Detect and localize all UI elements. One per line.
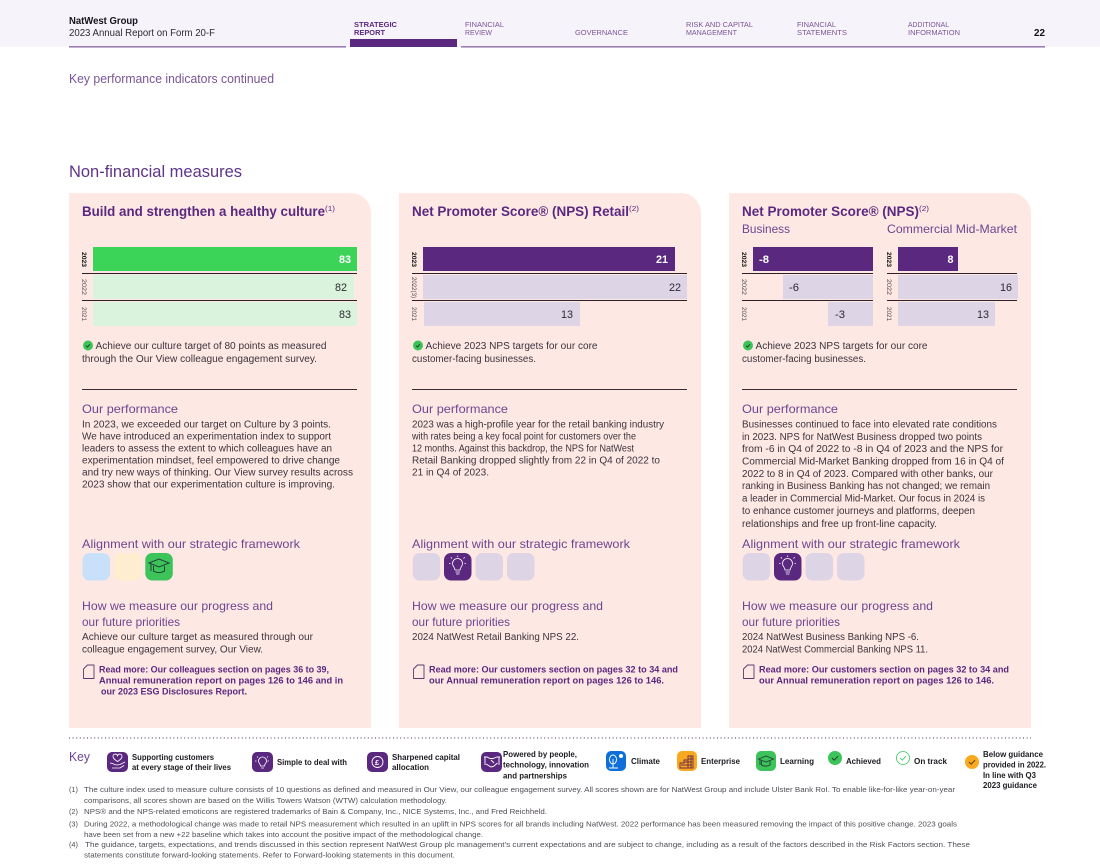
nav: financial statements (797, 20, 847, 37)
key: supporting customers: Supporting customers (132, 752, 214, 762)
our performance: Our performance (82, 402, 178, 416)
our performance: Businesses continued to face into elevated rate conditions (742, 420, 997, 430)
how we measure: How we measure our progress and (82, 599, 273, 613)
bar chart: commercial mid-market NPS: 2023 (885, 252, 892, 268)
target statement (742, 340, 928, 365)
our performance: We have introduced an experimentation index to support (82, 432, 331, 442)
our performance: experimentation mindset, feel empowered to drive change (82, 456, 340, 466)
strategic framework: Alignment with our strategic framework (412, 537, 631, 551)
our performance (742, 402, 1004, 530)
key: powered by people: and partnerships (503, 770, 567, 780)
strategic framework (742, 537, 961, 580)
key: below guidance (965, 749, 1046, 790)
our performance: with rates being a key focal point for customers over the (411, 432, 636, 442)
bar chart: business NPS (740, 247, 873, 326)
key: achieved: Achieved (846, 756, 881, 766)
key legend (69, 749, 1046, 790)
our performance: a leader in Commercial Mid-Market. Our focus in 2024 is (742, 494, 985, 504)
sub heading: commercial mid-market: Commercial Mid-Market (887, 222, 1018, 236)
report name: NatWest Group (69, 16, 138, 27)
key: supporting customers: at every stage of their lives (132, 762, 231, 772)
bar chart: business NPS: 2023 (740, 252, 747, 268)
bar chart: culture score: 83 (339, 309, 351, 321)
our performance (411, 402, 664, 478)
sub heading: business: Business (742, 222, 790, 236)
footnote 3: (3) (69, 820, 78, 828)
key: powered by people: technology, innovation (503, 760, 589, 770)
bar chart: commercial mid-market NPS: 2021 (885, 307, 892, 322)
target statement: customer-facing businesses. (412, 354, 536, 365)
our performance: 2022 to 8 in Q4 of 2023. Compared with other banks, our (742, 469, 994, 480)
panel title: Net Promoter Score® (NPS) Retail (412, 204, 629, 219)
how we measure: Achieve our culture target as measured through our (82, 632, 314, 643)
bar chart: retail NPS: 2023 (410, 252, 417, 268)
key: below guidance: Below guidance (983, 749, 1043, 759)
our performance: ranking in Business Banking has not changed; we remain (742, 481, 990, 492)
nav: financial review: REVIEW (465, 28, 493, 37)
read more: our Annual remuneration report on pages 126 to 146. (759, 676, 994, 686)
nav: financial review: FINANCIAL (465, 20, 504, 29)
footnote 1: The culture index used to measure culture consists of 10 questions as defined and measured in Our View, our colleague engagement survey. All scores shown are for NatWest Group and include Ulster Bank RoI. To enable like-for-like year-on-year (84, 785, 956, 794)
footnote 1 (69, 785, 956, 805)
report name: 2023 Annual Report on Form 20-F (69, 28, 215, 39)
nav: risk and capital management (686, 20, 753, 37)
key: on track: On track (914, 756, 947, 766)
bar chart: culture score: 82 (335, 282, 347, 294)
how we measure (742, 599, 933, 656)
key: climate (606, 751, 660, 771)
bar chart: business NPS: -3 (835, 309, 845, 321)
bar chart: business NPS: 2021 (740, 307, 747, 322)
how we measure: How we measure our progress and (412, 599, 603, 613)
bar chart: retail NPS: 13 (561, 309, 573, 321)
nav: financial statements: FINANCIAL (797, 20, 836, 29)
nav: additional information: ADDITIONAL (908, 20, 949, 29)
icon: simple to deal with (444, 553, 472, 580)
footnote 4 (69, 840, 970, 860)
bar chart: business NPS: 2022 (740, 279, 747, 296)
panel title: Net Promoter Score® (NPS) (742, 204, 919, 219)
how we measure (412, 599, 603, 643)
our performance: Commercial Mid-Market Banking dropped from 16 in Q4 of (742, 456, 1004, 468)
report name (69, 16, 215, 39)
nav: governance: GOVERNANCE (575, 28, 628, 37)
panel: NPS retail (399, 193, 701, 728)
bar chart: culture score (80, 247, 357, 326)
strategic framework: Alignment with our strategic framework (742, 537, 961, 551)
bar chart: culture score: 2023 (80, 252, 87, 268)
panel title: (2) (919, 204, 930, 213)
read more (744, 664, 1009, 686)
read more: Annual remuneration report on pages 126 to 146 and in (99, 676, 343, 686)
panel title: (1) (325, 204, 336, 213)
our performance: Our performance (412, 402, 508, 416)
target statement (412, 340, 598, 365)
footnotes (69, 785, 970, 860)
bar chart: culture score: 2022 (80, 279, 87, 296)
how we measure: our future priorities (742, 615, 840, 629)
read more: our Annual remuneration report on pages 126 to 146. (429, 676, 664, 686)
bar chart: commercial mid-market NPS: 2022 (885, 279, 892, 296)
nav: risk and capital management: MANAGEMENT (686, 28, 737, 37)
panel: healthy culture (69, 193, 371, 728)
bar chart: retail NPS: 22 (669, 282, 681, 294)
key: powered by people (481, 749, 589, 780)
our performance: In 2023, we exceeded our target on Culture by 3 points. (82, 420, 331, 430)
our performance: relationships and free up front-line capacity. (742, 519, 937, 530)
nav: additional information: INFORMATION (908, 28, 960, 37)
our performance: Our performance (742, 402, 838, 416)
footnote 4: statements constitute forward-looking statements. Refer to Forward-looking statements in this document. (84, 850, 455, 860)
how we measure: How we measure our progress and (742, 599, 933, 613)
target statement (82, 340, 326, 365)
nav: financial statements: STATEMENTS (797, 28, 847, 37)
our performance (82, 402, 353, 490)
key heading: Key (69, 750, 91, 764)
our performance: in 2023. NPS for NatWest Business dropped two points (742, 432, 982, 443)
how we measure: colleague engagement survey, Our View. (82, 644, 263, 656)
our performance: 21 in Q4 of 2023. (412, 468, 489, 478)
our performance: leaders to assess the extent to which colleagues have an (82, 444, 332, 454)
target statement: through the Our View colleague engagement survey. (82, 354, 317, 365)
bar chart: retail NPS: 21 (656, 254, 668, 266)
bar chart: retail NPS: 2021 (410, 307, 417, 322)
active nav tab: strategic report (350, 20, 457, 47)
our performance: and try new ways of thinking. Our View survey results across (82, 468, 353, 478)
icon: learning (145, 553, 173, 580)
strategic framework (412, 537, 631, 580)
our performance: 12 months. Against this backdrop, the NPS for NatWest (412, 444, 634, 454)
footnote 4: The guidance, targets, expectations, and trends discussed in this section represent NatWest Group plc management's current expectations and are subject to change, including as a result of the factors described in the Risk Factors section. These (85, 840, 970, 849)
page number: 22 (1034, 28, 1045, 39)
bar chart: retail NPS: 2022(3) (410, 277, 417, 298)
how we measure: 2024 NatWest Commercial Banking NPS 11. (742, 644, 928, 656)
footnote 1: comparisons, all scores shown are based on the Willis Towers Watson (WTW) calculation methodology. (84, 796, 447, 805)
key: enterprise: Enterprise (701, 756, 740, 766)
key: simple to deal with: Simple to deal with (277, 757, 347, 767)
how we measure: 2024 NatWest Retail Banking NPS 22. (412, 632, 579, 643)
our performance: 2023 was a high-profile year for the retail banking industry (412, 420, 664, 430)
key: sharpened capital allocation: £ (375, 758, 380, 767)
key: below guidance: In line with Q3 (983, 770, 1036, 780)
read more: our 2023 ESG Disclosures Report. (101, 686, 247, 696)
nav: additional information (908, 20, 960, 37)
key: sharpened capital allocation (367, 752, 460, 772)
bar chart: commercial mid-market NPS (885, 247, 1018, 326)
read more (84, 664, 343, 696)
how we measure: 2024 NatWest Business Banking NPS -6. (742, 632, 919, 643)
footnote 2: NPS® and the NPS-related emoticons are registered trademarks of Bain & Company, Inc., NICE Systems, Inc., and Fred Reichheld. (84, 807, 547, 816)
active nav tab: strategic report: STRATEGIC (354, 20, 398, 29)
strategic framework (82, 537, 301, 580)
key: on track (896, 752, 947, 766)
our performance: 2023 show that our experimentation culture is improving. (82, 480, 335, 490)
footnote 3: have been set from a new +22 baseline which takes into account the positive impact of the methodological change. (84, 830, 483, 839)
icon: simple to deal with (774, 553, 802, 580)
footnote 4: (4) (69, 840, 78, 849)
how we measure: our future priorities (82, 615, 180, 629)
panel title: Build and strengthen a healthy culture (82, 204, 325, 219)
panel title: (2) (629, 204, 640, 213)
how we measure: our future priorities (412, 615, 510, 629)
read more: Read more: Our customers section on pages 32 to 34 and (429, 664, 678, 674)
key: learning: Learning (780, 756, 814, 766)
key: below guidance: 2023 guidance (983, 780, 1037, 790)
key: climate: Climate (631, 756, 660, 766)
our performance: to enhance customer journeys and platforms, deepen (742, 506, 975, 517)
read more (414, 664, 678, 686)
key: below guidance: provided in 2022. (983, 760, 1046, 770)
key: learning (756, 751, 814, 771)
bar chart: culture score: 83 (339, 254, 351, 266)
key: powered by people: Powered by people, (503, 749, 577, 759)
page header (0, 0, 1100, 48)
target statement: Achieve 2023 NPS targets for our core (426, 341, 598, 352)
key: sharpened capital allocation: Sharpened capital (392, 752, 460, 762)
bar chart: business NPS: -8 (759, 254, 769, 266)
target statement: Achieve 2023 NPS targets for our core (756, 341, 928, 352)
footnote 3: During 2022, a methodological change was made to retail NPS measurement which resulted in an uplift in NPS scores for all brands including NatWest. 2022 performance has been measured removing the impact of this positive change. 2023 goals (84, 820, 957, 828)
strategic framework: Alignment with our strategic framework (82, 537, 301, 551)
read more: Read more: Our colleagues section on pages 36 to 39, (99, 664, 329, 674)
bar chart: commercial mid-market NPS: 8 (948, 254, 954, 266)
bar chart: culture score: 2021 (80, 307, 87, 322)
key: sharpened capital allocation: allocation (392, 762, 429, 772)
key: achieved (828, 751, 881, 766)
bar chart: commercial mid-market NPS: 16 (1000, 282, 1012, 294)
active nav tab: strategic report: REPORT (354, 28, 385, 37)
nav: financial review (465, 20, 504, 37)
bar chart: retail NPS (410, 247, 687, 326)
key: supporting customers (107, 752, 231, 772)
section label: Key performance indicators continued (69, 72, 274, 86)
key: enterprise (677, 751, 740, 771)
main heading: Non-financial measures (69, 162, 242, 181)
our performance: from -6 in Q4 of 2022 to -8 in Q4 of 2023 and the NPS for (742, 444, 1004, 455)
footnote 2: (2) (69, 807, 78, 816)
our performance: Retail Banking dropped slightly from 22 in Q4 of 2022 to (412, 456, 660, 466)
nav: risk and capital management: RISK AND CAPITAL (686, 20, 753, 29)
key: simple to deal with (252, 752, 347, 772)
footnote 3 (69, 820, 957, 839)
bar chart: business NPS: -6 (789, 282, 799, 294)
panel: NPS business and commercial (729, 193, 1031, 728)
read more: Read more: Our customers section on pages 32 to 34 and (759, 664, 1009, 674)
target statement: customer-facing businesses. (742, 354, 866, 365)
how we measure (82, 599, 314, 656)
bar chart: commercial mid-market NPS: 13 (977, 309, 989, 321)
target statement: Achieve our culture target of 80 points as measured (96, 341, 326, 352)
footnote 1: (1) (69, 785, 78, 794)
